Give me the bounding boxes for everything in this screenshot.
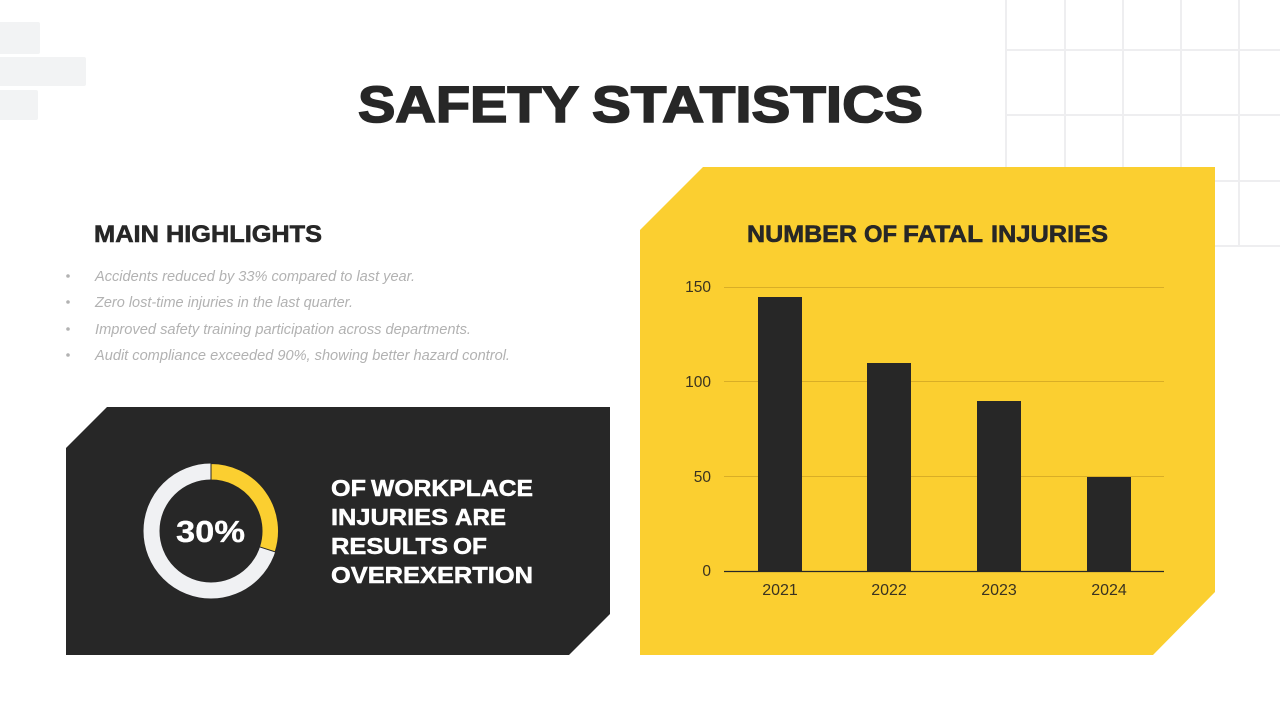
callout text: OF (453, 533, 487, 559)
x axis labels: 2022 (871, 582, 907, 599)
donut segment: 30% highlighted (211, 464, 279, 552)
y axis labels: 100 (685, 374, 711, 391)
bullet list: Improved safety training participation across departments. (95, 322, 471, 338)
bullet list (66, 269, 510, 364)
title (358, 76, 923, 133)
callout text: OVEREXERTION (331, 562, 533, 588)
dark panel background (66, 407, 610, 655)
chart heading: FATAL (903, 221, 983, 248)
callout text: RESULTS (331, 533, 448, 559)
donut chart: 30% (152, 464, 279, 590)
bar chart (685, 279, 1164, 599)
callout text (331, 475, 533, 588)
x axis labels: 2024 (1091, 582, 1127, 599)
callout text: ARE (455, 504, 506, 530)
callout text: OF (331, 475, 366, 501)
yellow panel background (640, 167, 1215, 655)
y axis labels: 50 (694, 469, 711, 486)
heading: main highlights: HIGHLIGHTS (166, 221, 322, 248)
chart heading: OF (864, 221, 897, 248)
x axis labels: 2021 (762, 582, 798, 599)
callout text: INJURIES (331, 504, 448, 530)
bullet list: Accidents reduced by 33% compared to last year. (94, 269, 415, 285)
panel: main highlights (66, 221, 510, 364)
bullet list: Zero lost-time injuries in the last quarter. (94, 295, 353, 311)
x axis labels: 2023 (981, 582, 1017, 599)
heading: main highlights (94, 221, 322, 248)
chart heading (747, 221, 1108, 248)
donut value: 30% (176, 514, 245, 549)
heading: main highlights: MAIN (94, 221, 159, 248)
bars (758, 297, 1131, 572)
chart heading: INJURIES (991, 221, 1108, 248)
panel: fatal injuries chart (640, 167, 1215, 655)
title: SAFETY (358, 76, 579, 133)
y axis labels: 0 (702, 563, 711, 580)
bullet list: Audit compliance exceeded 90%, showing better hazard control. (94, 348, 510, 364)
chart heading: NUMBER (747, 221, 857, 248)
x axis labels (762, 582, 1127, 599)
y axis labels (685, 279, 711, 580)
callout text: WORKPLACE (371, 475, 533, 501)
panel: overexertion callout (66, 407, 610, 655)
title: STATISTICS (592, 76, 923, 133)
y axis labels: 150 (685, 279, 711, 296)
